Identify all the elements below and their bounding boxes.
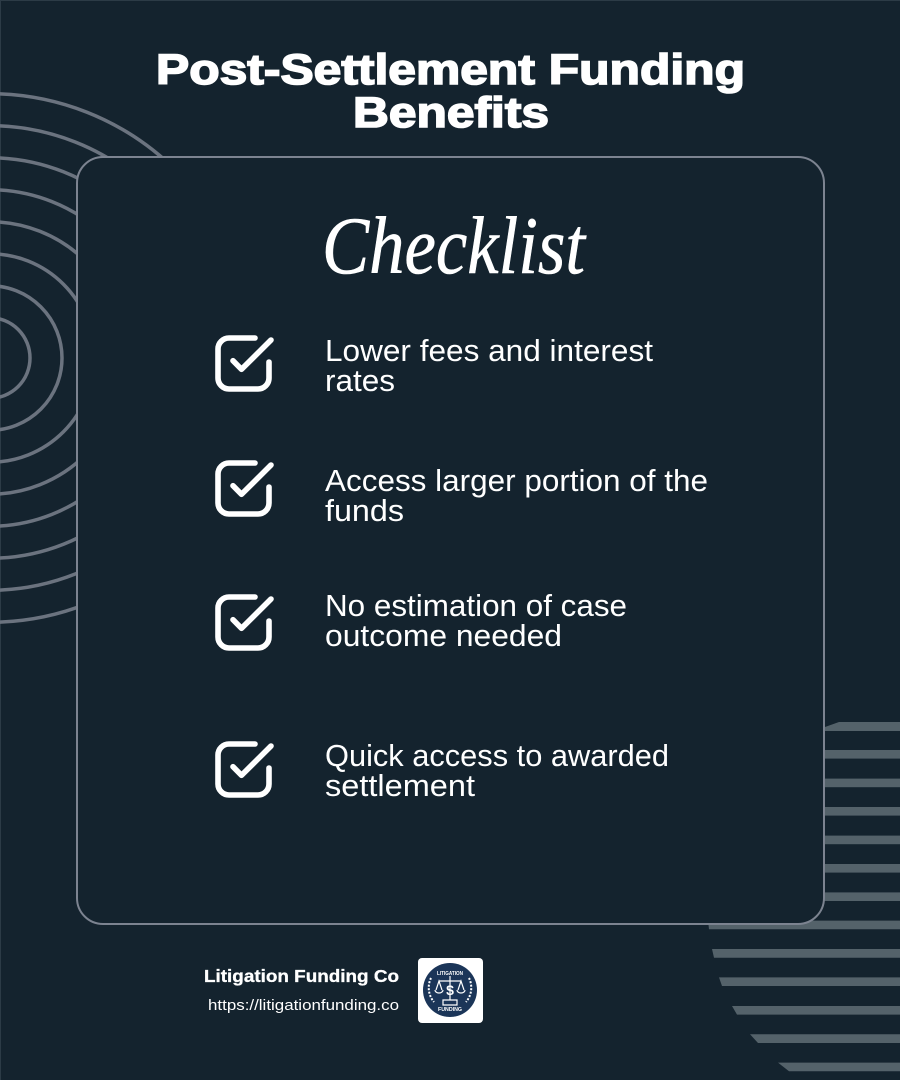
striped decoration	[708, 722, 900, 1071]
text: item 4: Quick access to awarded	[325, 738, 669, 773]
icon: checkbox 3	[218, 597, 271, 648]
icon: logo badge: FUNDING	[438, 1007, 462, 1013]
text: item 1: Lower fees and interest	[325, 333, 653, 368]
icon: logo badge	[418, 958, 483, 1023]
text: item 1	[325, 333, 653, 398]
title: Post-Settlement Funding	[156, 46, 745, 94]
footer brand name: Litigation Funding Co	[204, 966, 399, 986]
icon: checkbox 4	[218, 744, 271, 795]
text: item 4: settlement	[325, 768, 475, 803]
icon: checkbox 2	[218, 463, 271, 514]
text: item 1: rates	[325, 363, 395, 398]
footer url: https://litigationfunding.co	[208, 997, 399, 1014]
text: item 2: Access larger portion of the	[325, 463, 708, 498]
panel: checklist	[77, 157, 824, 924]
checklist item 1	[218, 333, 653, 398]
title	[156, 46, 745, 137]
heading: Checklist: Checklist	[322, 200, 587, 291]
icon: logo badge: $	[446, 982, 454, 998]
text: item 2	[325, 463, 708, 528]
text: item 3: outcome needed	[325, 618, 562, 653]
icon: logo badge: LITIGATION	[437, 971, 463, 977]
text: item 4	[325, 738, 669, 803]
title: Benefits	[353, 89, 549, 137]
text: item 3: No estimation of case	[325, 588, 627, 623]
checklist item 2	[218, 463, 708, 528]
checklist item 4	[218, 738, 669, 803]
checklist item 3	[218, 588, 627, 653]
concentric arcs decoration	[0, 92, 163, 624]
icon: checkbox 1	[218, 338, 271, 389]
text: item 2: funds	[325, 493, 404, 528]
text: item 3	[325, 588, 627, 653]
